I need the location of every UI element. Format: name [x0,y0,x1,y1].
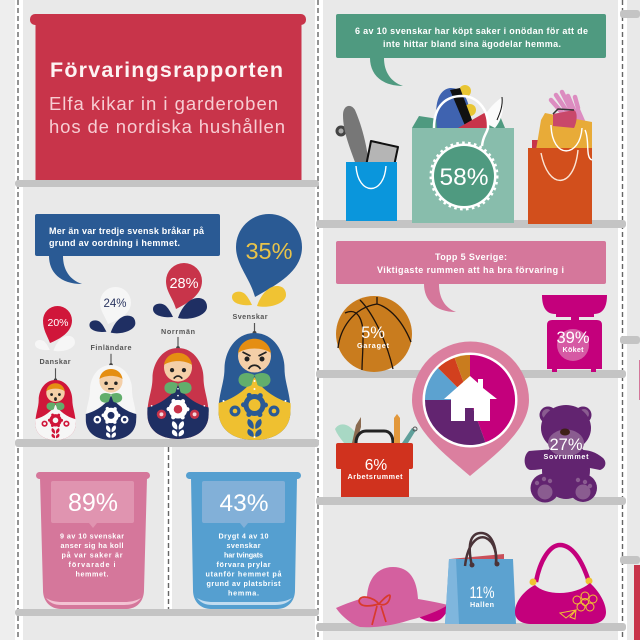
drop: Finländare 24% [89,287,135,333]
callout: green speech bubble [336,14,606,86]
subtitle: Elfa kikar in i garderoben [49,93,278,114]
drop: Svenskar 35% [232,214,302,307]
callout: pink speech bubble: Viktigaste rummen att ha bra förvaring i [377,265,564,275]
panel: pink jar 89%: anser sig ha koll [60,541,124,550]
panel: blue jar 43%: förvara prylar [216,560,271,569]
icon: basketball 5% Garaget: Garaget [357,341,390,350]
drop: Danskar 20% [35,306,75,351]
doll: Svenskar [218,323,291,440]
callout: green speech bubble: 6 av 10 svenskar har köpt saker i onödan för att de [355,26,588,36]
icon: blue shopping bag 11% Hallen [445,533,516,624]
icon: teddy bear 27% Sovrummet: 27% [550,436,583,454]
icon: kitchen scale 39% Köket [542,295,607,372]
panel: blue jar 43%: har tvingats [224,550,263,560]
panel: blue jar 43%: hemma. [228,588,259,598]
panel: blue jar 43%: Drygt 4 av 10 [218,532,268,541]
doll: Danskar [35,368,76,440]
icon: house pin with pie chart [412,342,529,476]
icon: blue bag with skateboard and tablet [336,106,398,221]
icon: green bag with items and 58% badge: 58% [440,164,488,191]
doll: Finländare [86,354,136,440]
icon: blue shopping bag 11% Hallen: Hallen [470,600,494,609]
icon: teddy bear 27% Sovrummet [525,405,605,502]
panel: blue jar 43% [186,472,301,609]
icon: basketball 5% Garaget [336,296,412,372]
callout: blue speech bubble: grund av oordning i hemmet. [49,238,180,248]
panel: pink jar 89% [36,472,150,609]
callout: pink speech bubble [336,241,606,312]
drop: Svenskar 35%: 35% [246,238,293,264]
icon: orange bag with yellow bag and glove [528,92,592,224]
icon: teddy bear 27% Sovrummet: Sovrummet [544,452,589,461]
label: Finländare: Finländare [90,343,132,352]
callout: green speech bubble: inte hittar bland sina ägodelar hemma. [383,39,561,49]
icon: pink hat [336,567,448,627]
panel: pink jar 89%: på var saker är [62,551,123,560]
icon: blue shopping bag 11% Hallen: 11% [470,583,494,602]
panel: blue jar 43%: svenskar [226,541,261,550]
icon: toolbox 6% Arbetsrummet: Arbetsrummet [348,472,403,481]
callout: pink speech bubble: Topp 5 Sverige: [435,252,507,262]
panel: pink jar 89%: 89% [68,489,118,517]
icon: green bag with items and 58% badge [412,85,514,223]
panel: pink jar 89%: hemmet. [76,570,108,579]
icon: magenta handbag with flower [515,545,606,624]
callout: blue speech bubble: Mer än var tredje svensk bråkar på [49,226,205,236]
doll: Norrmän [147,337,209,439]
icon: toolbox 6% Arbetsrummet: 6% [365,457,387,474]
drop: Norrmän 28%: 28% [170,276,199,292]
panel: blue jar 43%: utanför hemmet på [206,570,282,578]
panel: pink jar 89%: förvarade i [68,560,116,569]
icon: kitchen scale 39% Köket: 39% [556,329,590,347]
drop: Norrmän 28% [153,263,207,319]
label: Norrmän: Norrmän [161,327,195,336]
drop: Finländare 24%: 24% [104,298,126,310]
icon: basketball 5% Garaget: 5% [361,324,385,342]
panel: blue jar 43%: grund av platsbrist [206,579,281,588]
panel: blue jar 43%: 43% [220,490,268,517]
panel: pink jar 89%: 9 av 10 svenskar [60,532,124,541]
callout: blue speech bubble [35,214,220,284]
icon: toolbox 6% Arbetsrummet [335,414,417,497]
icon: kitchen scale 39% Köket: Köket [562,345,584,354]
drop: Danskar 20%: 20% [48,317,68,329]
subtitle: hos de nordiska hushållen [49,116,285,137]
label: Danskar: Danskar [40,357,71,366]
title: Förvaringsrapporten [50,58,283,82]
label: Svenskar: Svenskar [232,312,268,321]
panel: title banner [30,14,306,180]
